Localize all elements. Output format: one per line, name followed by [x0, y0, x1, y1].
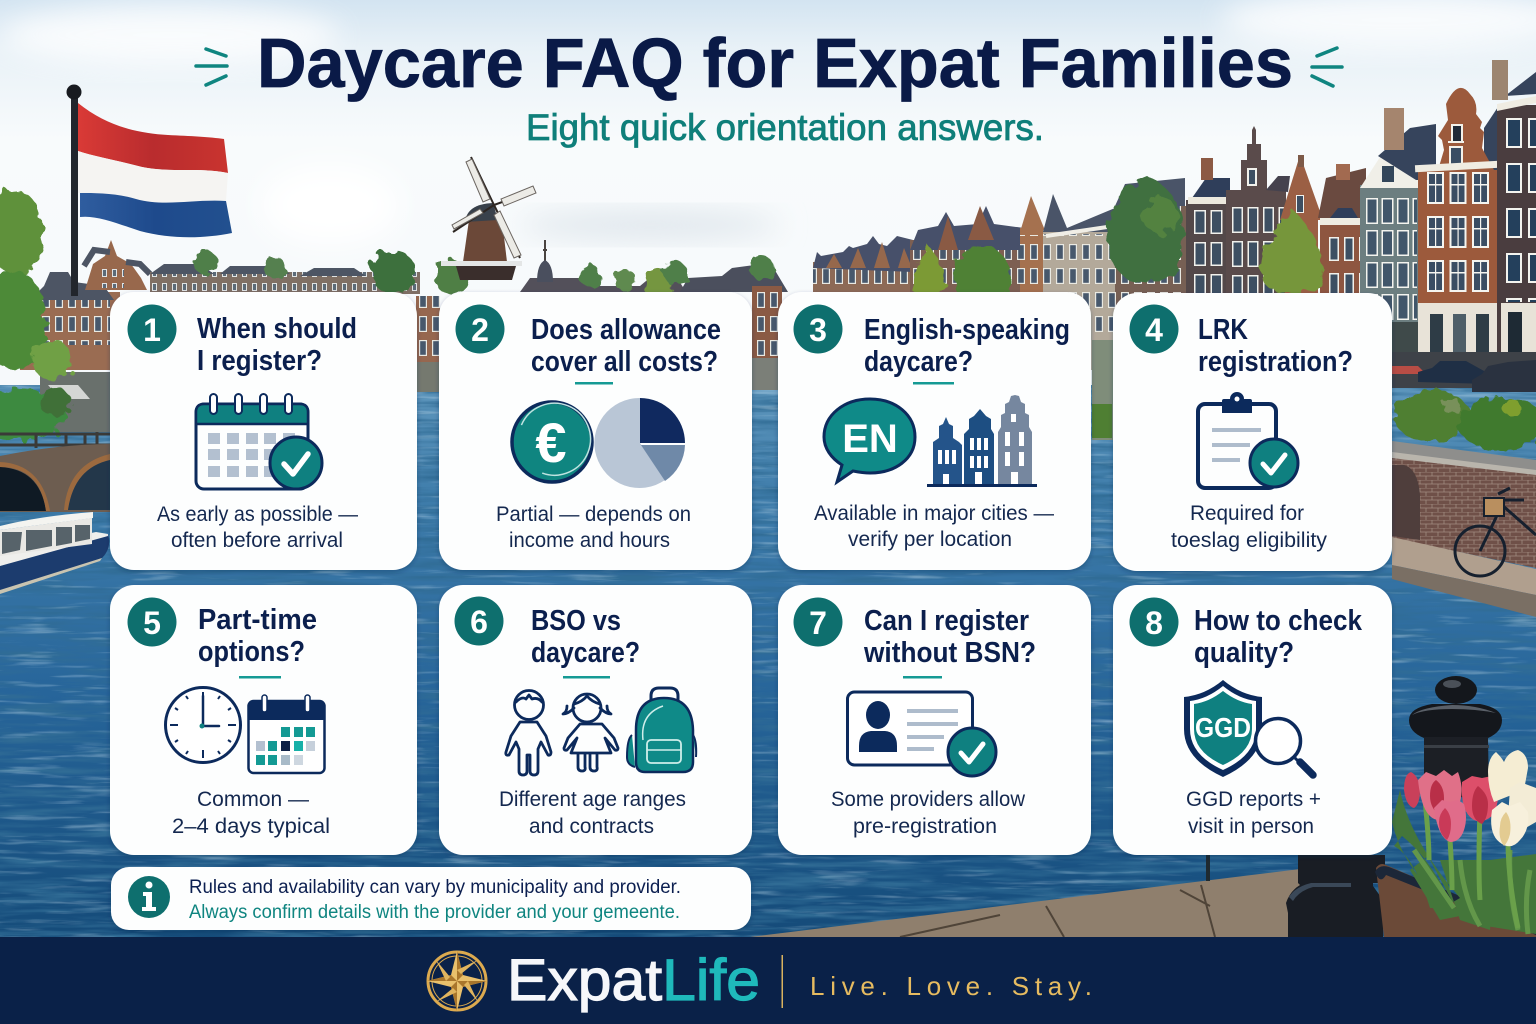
canal water: [0, 385, 1536, 945]
icon: girl figure: [563, 694, 618, 771]
flag pole: [66, 84, 82, 296]
tagline: Live. Love. Stay.: [810, 971, 1092, 1001]
number badge 3: 3: [809, 312, 827, 348]
right canal houses: [813, 60, 1536, 440]
number badge 2: [456, 304, 504, 354]
footer band: [0, 937, 1536, 1024]
icon: boy figure: [506, 690, 551, 775]
number badge 3: [794, 304, 842, 354]
answer 1: often before arrival: [171, 529, 343, 552]
bollard: [1409, 676, 1502, 797]
number badge 4: 4: [1145, 312, 1163, 348]
answer 6: and contracts: [529, 815, 654, 838]
icon: euro coin and pie chart: €: [535, 411, 567, 474]
panel: question 6: [439, 585, 752, 855]
heading: question 1: I register?: [197, 345, 322, 377]
answer 3: [814, 502, 1054, 551]
answer 4: Required for: [1190, 502, 1304, 525]
subtitle: Eight quick orientation answers.: [526, 107, 1044, 148]
number badge 6: 6: [470, 604, 488, 640]
heading: question 6: [531, 605, 640, 669]
number badge 8: 8: [1145, 605, 1163, 641]
brick gabled house: [1415, 88, 1500, 305]
panel: question 3: [778, 292, 1091, 570]
heading: question 4: LRK: [1198, 314, 1248, 346]
heading: question 4: registration?: [1198, 346, 1353, 378]
dark end house: [1492, 60, 1536, 370]
icon: part-time calendar: [248, 695, 325, 773]
icon: backpack: [627, 688, 696, 772]
answer 1: As early as possible —: [157, 503, 358, 526]
grey gabled house: [1360, 108, 1436, 370]
answer 4: [1171, 502, 1328, 552]
panel: question 8: [1113, 585, 1392, 855]
Dutch flag: [78, 103, 232, 237]
dock in foreground: [750, 855, 1385, 937]
note text: Rules and availability can vary by municipality and provider.: [189, 877, 681, 898]
icon: clipboard with check: [1198, 392, 1298, 488]
heading: question 3: English-speaking: [864, 314, 1070, 346]
icon: Dutch canal houses: [927, 395, 1037, 487]
number badge 6: [454, 596, 504, 646]
answer 7: Some providers allow: [831, 788, 1026, 811]
icon: GGD shield: [1184, 680, 1262, 777]
answer 8: [1186, 788, 1321, 838]
icon: information: [128, 876, 170, 918]
answer 3: verify per location: [848, 528, 1012, 551]
right quay: cars, bushes, wall, bicycle: [1092, 352, 1536, 617]
answer 2: [496, 503, 691, 552]
heading: question 5: [198, 604, 317, 668]
number badge 7: 7: [809, 605, 827, 641]
note text: Always confirm details with the provider and your gemeente.: [189, 902, 680, 923]
number badge 8: [1130, 598, 1178, 646]
accent marks left of title: [196, 49, 227, 85]
panel: question 1: [110, 292, 417, 570]
panel: question 4: [1113, 293, 1392, 571]
answer 5: Common —: [197, 788, 309, 811]
answer 8: visit in person: [1188, 815, 1314, 838]
heading: question 7: without BSN?: [863, 637, 1036, 669]
logo: ExpatLife wordmark: ExpatLife: [507, 948, 760, 1013]
answer 5: 2–4 days typical: [172, 815, 330, 838]
heading: question 3: [864, 314, 1070, 378]
title: Daycare FAQ for Expat Families: [257, 24, 1293, 102]
icon: EN speech bubble: [824, 399, 915, 482]
left bank: trees, bridge and boat: [0, 190, 110, 594]
heading: question 8: How to check: [1194, 605, 1363, 637]
answer 2: income and hours: [509, 529, 670, 552]
windmill: [441, 157, 536, 280]
number badge 5: [128, 598, 176, 646]
answer 6: Different age ranges: [499, 788, 686, 811]
heading: question 2: [531, 314, 721, 378]
icon: GGD shield: GGD: [1195, 712, 1251, 743]
heading: question 2: Does allowance: [531, 314, 721, 346]
icon: euro coin and pie chart: [512, 390, 685, 488]
note text: [189, 877, 681, 923]
panel: question 5: [110, 585, 417, 855]
icon: clock: [166, 688, 240, 762]
tulips in planter: [1375, 750, 1536, 937]
answer 6: [499, 788, 686, 838]
far skyline left: [20, 240, 788, 392]
icon: EN speech bubble: EN: [842, 417, 898, 461]
heading: question 8: quality?: [1194, 637, 1294, 669]
shop fronts: [1418, 303, 1536, 365]
number badge 7: [794, 598, 842, 646]
logo: compass: [427, 951, 487, 1011]
heading: question 1: [197, 313, 357, 377]
answer 7: [831, 788, 1026, 838]
number badge 5: 5: [143, 605, 161, 641]
panel: question 7: [778, 585, 1091, 855]
callout: disclaimer: [111, 867, 751, 930]
heading: question 5: Part-time: [198, 604, 317, 636]
heading: question 1: When should: [197, 313, 357, 345]
answer 5: [172, 788, 330, 838]
heading: question 6: daycare?: [531, 637, 640, 669]
heading: question 3: daycare?: [864, 346, 973, 378]
mansard house: [1186, 158, 1230, 370]
answer 8: GGD reports +: [1186, 788, 1321, 811]
number badge 4: [1130, 304, 1178, 354]
right bank trees: [913, 176, 1323, 305]
accent marks right of title: [1312, 48, 1342, 86]
answer 1: [157, 503, 358, 552]
heading: question 8: [1194, 605, 1363, 669]
heading: question 4: [1198, 314, 1353, 378]
icon: magnifying glass: [1256, 718, 1313, 775]
heading: question 2: cover all costs?: [531, 346, 718, 378]
number badge 1: [128, 304, 176, 354]
answer 2: Partial — depends on: [496, 503, 691, 526]
icon: ID card with check: [848, 692, 996, 776]
icon: calendar with check: [196, 394, 322, 489]
heading: question 5: options?: [198, 636, 305, 668]
number badge 2: 2: [471, 312, 489, 348]
number badge 1: 1: [143, 312, 161, 348]
heading: question 7: [863, 605, 1036, 669]
panel: question 2: [439, 292, 752, 570]
answer 7: pre-registration: [853, 815, 997, 838]
answer 3: Available in major cities —: [814, 502, 1054, 525]
trees along far bank: [193, 250, 774, 299]
stepped gable house: [1226, 126, 1323, 370]
heading: question 6: BSO vs: [531, 605, 621, 637]
answer 4: toeslag eligibility: [1171, 529, 1328, 552]
heading: question 7: Can I register: [864, 605, 1029, 637]
brown house: [1318, 164, 1366, 370]
